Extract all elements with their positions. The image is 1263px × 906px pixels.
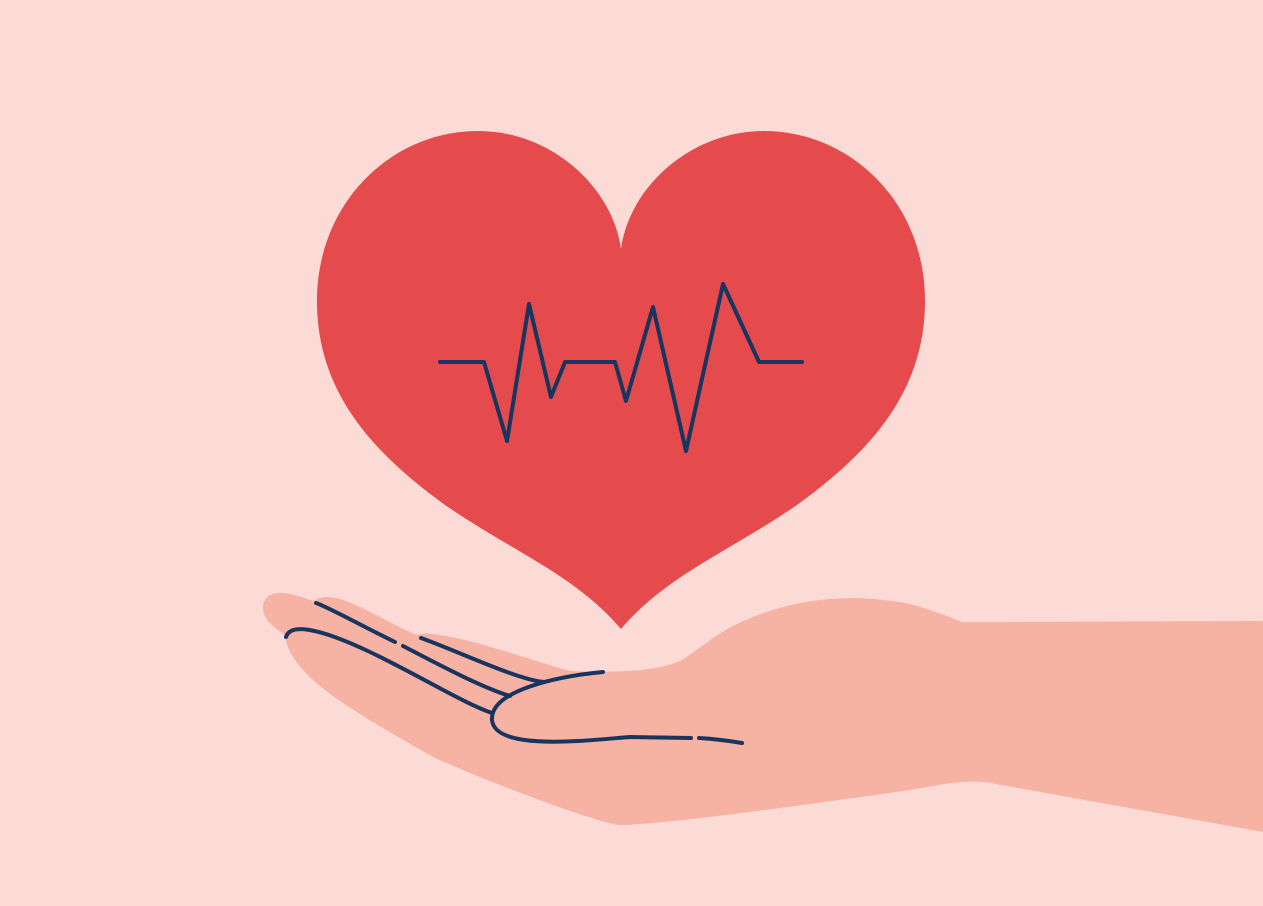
finger line: third bbox=[421, 638, 544, 682]
thumb line bbox=[492, 672, 691, 742]
palm line end bbox=[699, 738, 742, 743]
icon: open hand bbox=[263, 593, 1263, 832]
palm and finger lines bbox=[286, 603, 742, 743]
finger line: top bbox=[316, 603, 395, 642]
finger line: second bbox=[403, 646, 510, 696]
finger line: lower bbox=[286, 629, 492, 713]
icon: heartbeat pulse line bbox=[440, 284, 802, 451]
hand and arm shape bbox=[263, 593, 1263, 832]
icon: red heart bbox=[317, 131, 925, 629]
